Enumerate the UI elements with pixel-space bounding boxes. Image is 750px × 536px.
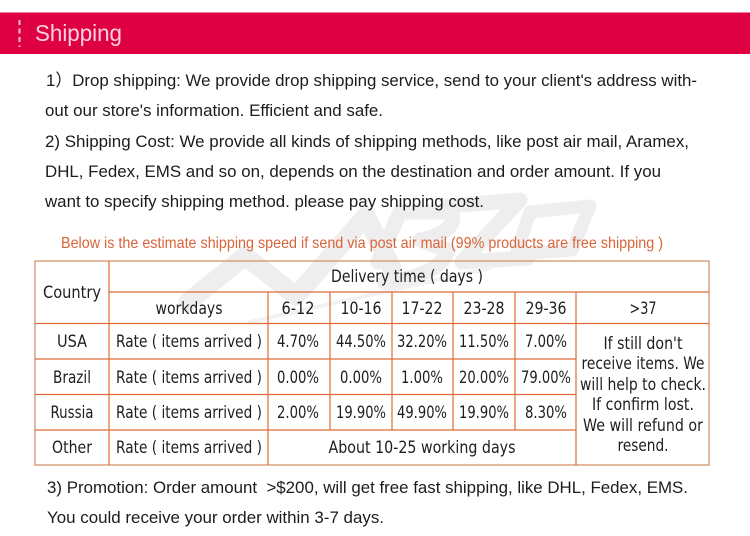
heading: Shipping: Shipping [35, 20, 122, 46]
row: USA [57, 332, 567, 351]
row: USA: 32.20% [397, 332, 447, 351]
table headers: Country [43, 283, 101, 302]
table headers: 17-22 [402, 299, 442, 318]
row: Russia [50, 403, 567, 422]
row: USA: 11.50% [459, 332, 509, 351]
table headers: 6-12 [282, 299, 314, 318]
table headers: >37 [630, 299, 656, 318]
paragraph 1: drop shipping: 1）Drop shipping: We provide drop shipping service, send to your client's address with- [46, 71, 697, 90]
watermark [188, 200, 590, 322]
row: Brazil: Rate ( items arrived ) [116, 368, 262, 387]
table headers: workdays [156, 299, 222, 318]
note: lost items: If confirm lost. [592, 395, 694, 414]
paragraph 3: promotion: 3) Promotion: Order amount >$200, will get free fast shipping, like DHL, Fedex, EMS. [47, 478, 688, 497]
paragraph 1: drop shipping [45, 71, 697, 120]
paragraph 3: promotion: You could receive your order within 3-7 days. [47, 508, 384, 527]
note: lost items: If still don't [604, 334, 683, 353]
row: USA: 7.00% [525, 332, 567, 351]
row: Russia: 19.90% [459, 403, 509, 422]
icon: dashed divider [18, 20, 20, 47]
row: Brazil: Brazil [53, 368, 91, 387]
paragraph 3: promotion [47, 478, 688, 527]
table headers: 23-28 [464, 299, 504, 318]
header band [0, 12, 750, 54]
paragraph 2: shipping cost: 2) Shipping Cost: We provide all kinds of shipping methods, like post air mail, Aramex, [45, 132, 689, 151]
delivery time table [35, 261, 709, 465]
row: Russia: 49.90% [397, 403, 447, 422]
note: lost items [580, 334, 706, 455]
row: USA: Rate ( items arrived ) [116, 332, 262, 351]
note: lost items: receive items. We [582, 354, 704, 373]
row: Other [52, 438, 516, 457]
row: Russia: Rate ( items arrived ) [116, 403, 262, 422]
table headers: 10-16 [340, 299, 382, 318]
table caption: Below is the estimate shipping speed if send via post air mail (99% products are free shipping ) [61, 235, 663, 252]
row: Brazil: 79.00% [521, 368, 571, 387]
row: Russia: 19.90% [336, 403, 386, 422]
row: Russia: 8.30% [525, 403, 567, 422]
row: Brazil: 20.00% [459, 368, 509, 387]
table headers: Delivery time ( days ) [331, 267, 483, 286]
row: Brazil: 1.00% [401, 368, 443, 387]
note: lost items: resend. [618, 436, 668, 455]
row: Russia: Russia [50, 403, 94, 422]
note: lost items: We will refund or [583, 416, 703, 435]
row: Brazil: 0.00% [277, 368, 319, 387]
table headers [43, 267, 656, 318]
note: lost items: will help to check. [580, 375, 706, 394]
paragraph 1: drop shipping: out our store's information. Efficient and safe. [45, 101, 383, 120]
row: Other: Rate ( items arrived ) [116, 438, 262, 457]
paragraph 2: shipping cost: want to specify shipping method. please pay shipping cost. [44, 192, 484, 211]
row: USA: USA [57, 332, 88, 351]
paragraph 2: shipping cost: DHL, Fedex, EMS and so on, depends on the destination and order amount. If you [45, 162, 661, 181]
row: Russia: 2.00% [277, 403, 319, 422]
table grid [35, 261, 709, 465]
row: Brazil [53, 368, 571, 387]
row: Brazil: 0.00% [340, 368, 382, 387]
row: Other: Other [52, 438, 92, 457]
paragraph 2: shipping cost [44, 132, 689, 211]
table headers: 29-36 [526, 299, 566, 318]
row: Other: About 10-25 working days [328, 438, 516, 457]
row: USA: 44.50% [336, 332, 386, 351]
row: USA: 4.70% [277, 332, 319, 351]
